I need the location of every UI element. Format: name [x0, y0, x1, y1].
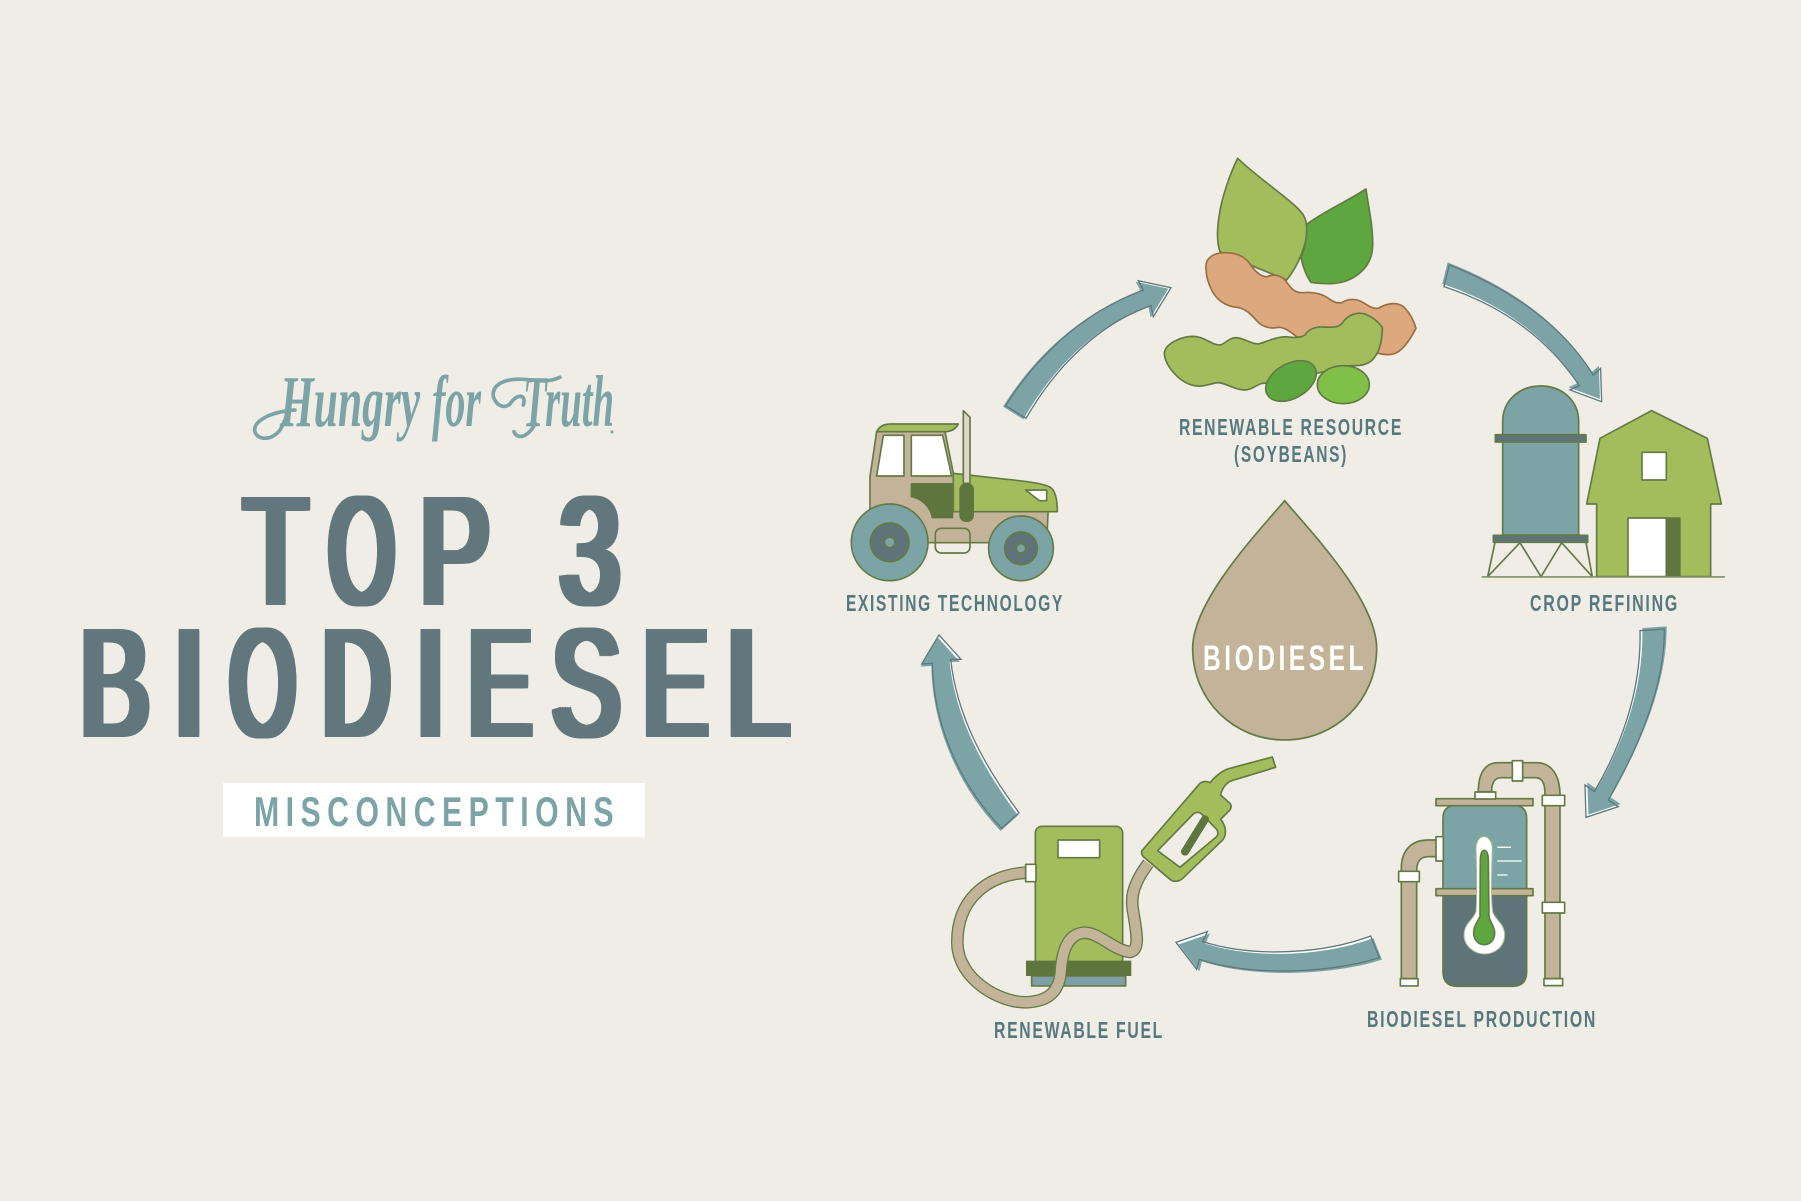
heading: BIODIESEL: O — [230, 597, 295, 769]
label: existing technology: EXISTING TECHNOLOGY — [846, 590, 1064, 616]
heading: TOP 3: O — [329, 465, 394, 637]
heading: TOP 3: 3 — [560, 465, 620, 637]
heading: TOP 3: P — [420, 465, 490, 637]
label: renewable resource: RENEWABLE RESOURCE — [1179, 414, 1403, 440]
heading: BIODIESEL: I — [416, 597, 445, 769]
logo: Hungry for Truth: Truth — [523, 361, 614, 442]
label: crop refining: CROP REFINING — [1530, 590, 1679, 616]
heading: TOP 3: T — [244, 465, 307, 637]
heading: BIODIESEL — [80, 597, 791, 769]
label: renewable fuel: RENEWABLE FUEL — [994, 1017, 1164, 1043]
logo: Hungry for Truth: Hungry — [279, 361, 420, 442]
heading: BIODIESEL: B — [80, 597, 150, 769]
logo: Hungry for Truth — [255, 361, 614, 442]
badge: MISCONCEPTIONS — [223, 783, 645, 837]
heading: BIODIESEL: L — [727, 597, 789, 769]
heading: BIODIESEL: E — [644, 597, 707, 769]
icon: biodiesel reactor — [1399, 761, 1565, 986]
heading: BIODIESEL: S — [552, 597, 621, 769]
arrow: renewable resource to crop refining — [1442, 262, 1602, 402]
icon: silo and barn — [1482, 386, 1725, 577]
arrow: existing technology to renewable resource — [1003, 281, 1171, 419]
center drop: biodiesel — [1193, 501, 1377, 740]
heading: BIODIESEL: I — [174, 597, 204, 769]
heading: BIODIESEL: E — [469, 597, 531, 769]
arrow: crop refining to biodiesel production — [1585, 626, 1667, 817]
heading: BIODIESEL: D — [323, 597, 390, 769]
heading: TOP 3 — [241, 465, 620, 637]
label: renewable resource: (SOYBEANS) — [1234, 441, 1348, 467]
icon: soybean plant — [1164, 158, 1416, 410]
badge: MISCONCEPTIONS: MISCONCEPTIONS — [254, 788, 620, 835]
icon: fuel pump and nozzle — [957, 757, 1276, 1002]
logo: Hungry for Truth: for — [432, 361, 481, 442]
arrow: biodiesel production to renewable fuel — [1176, 932, 1382, 973]
label: biodiesel production: BIODIESEL PRODUCTION — [1367, 1006, 1597, 1032]
icon: tractor — [851, 411, 1057, 581]
label: renewable resource — [1179, 414, 1403, 467]
arrow: renewable fuel to existing technology — [921, 635, 1019, 831]
center drop: biodiesel: BIODIESEL — [1203, 639, 1367, 678]
